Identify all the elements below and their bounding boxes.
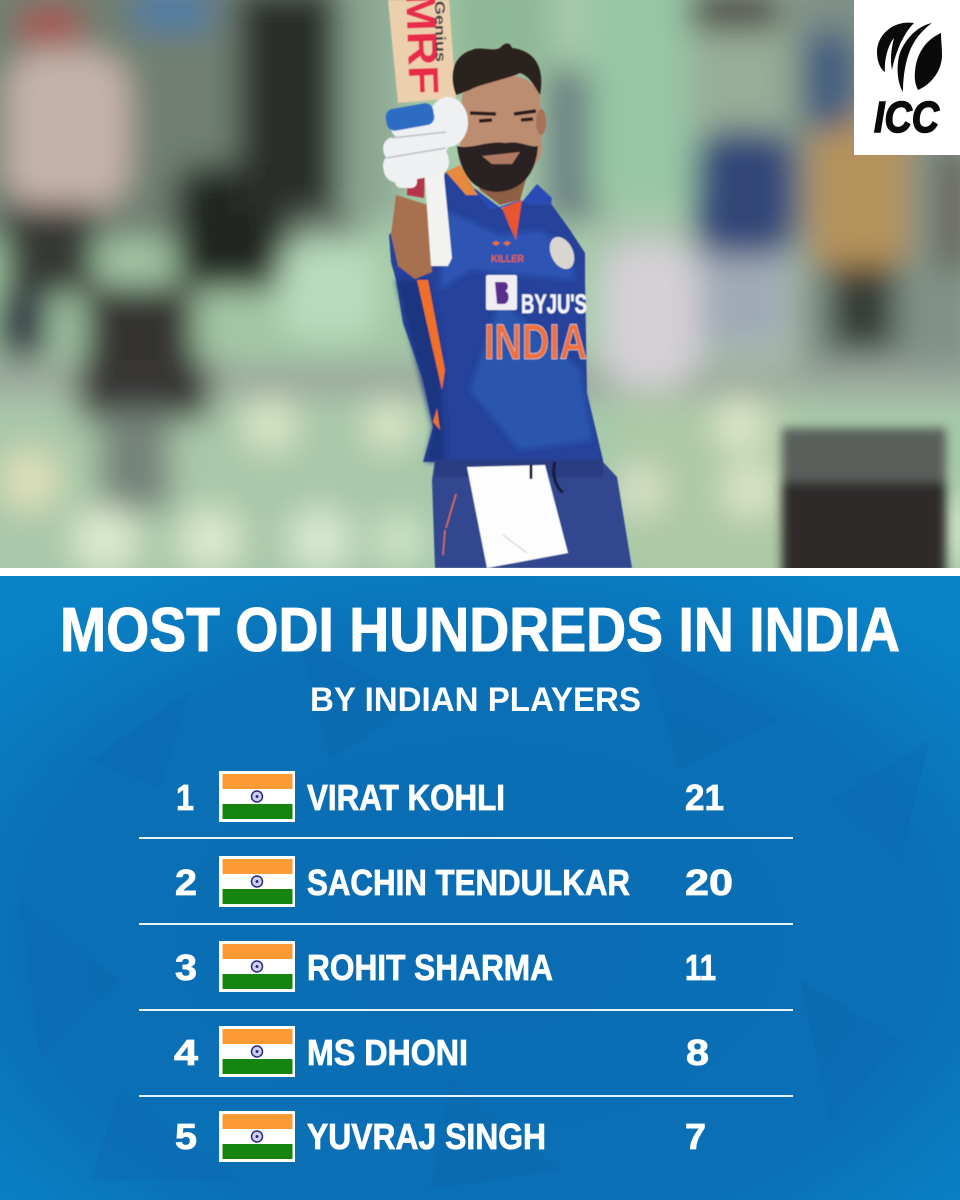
table row 1: VIRAT KOHLI	[307, 777, 505, 818]
ICC ball mark	[877, 23, 942, 92]
forearm	[391, 195, 432, 279]
ICC logo panel	[854, 0, 960, 155]
beard	[457, 142, 538, 192]
glove	[381, 97, 468, 188]
hair	[453, 44, 541, 95]
towel fold	[503, 535, 527, 553]
table row 2: 20	[685, 862, 733, 903]
table row 3	[175, 941, 716, 992]
photo: blurred stadium crowd	[0, 0, 960, 592]
towel	[467, 465, 568, 568]
table row 1: 1	[176, 777, 194, 818]
table row 4	[174, 1026, 709, 1077]
jersey stripe	[417, 280, 445, 390]
neck	[478, 178, 526, 206]
table row 3: 3	[175, 947, 197, 988]
collar	[446, 165, 478, 195]
table row 2	[175, 856, 733, 907]
ear	[536, 109, 546, 135]
drawstring	[531, 462, 563, 492]
table row 4: MS DHONI	[307, 1032, 468, 1073]
table row 4: 8	[686, 1032, 709, 1073]
sponsor logo	[486, 275, 517, 310]
photo: batter raising his bat	[381, 0, 632, 568]
ICC wordmark: ICC	[874, 93, 940, 142]
bat blade	[388, 0, 456, 103]
table row 1: 21	[685, 777, 724, 818]
table row 2: 2	[175, 862, 197, 903]
table row 1	[176, 771, 724, 822]
table row 5: 5	[175, 1116, 197, 1157]
crest	[548, 236, 576, 270]
table row 5	[175, 1111, 706, 1162]
kit logo: KILLER	[491, 254, 525, 265]
brows and eyes	[470, 111, 536, 114]
table row 3: 11	[685, 947, 716, 988]
table row 2: SACHIN TENDULKAR	[307, 862, 630, 903]
sponsor text: BYJU'S	[521, 289, 587, 319]
table row 3: ROHIT SHARMA	[307, 947, 553, 988]
table row 5: YUVRAJ SINGH	[307, 1116, 546, 1157]
table row 4: 4	[174, 1032, 198, 1073]
jersey highlights	[396, 210, 592, 462]
table row 5: 7	[685, 1116, 706, 1157]
subtitle: BY INDIAN PLAYERS	[310, 681, 641, 719]
shorts	[432, 460, 632, 568]
face	[460, 74, 542, 166]
blue panel	[0, 576, 960, 1200]
shorts piping	[443, 494, 456, 555]
team name: INDIA	[484, 314, 587, 370]
bat handle	[424, 165, 452, 266]
jersey	[389, 172, 603, 462]
bat brand text: Genius	[432, 1, 449, 62]
wrist band	[406, 177, 426, 199]
